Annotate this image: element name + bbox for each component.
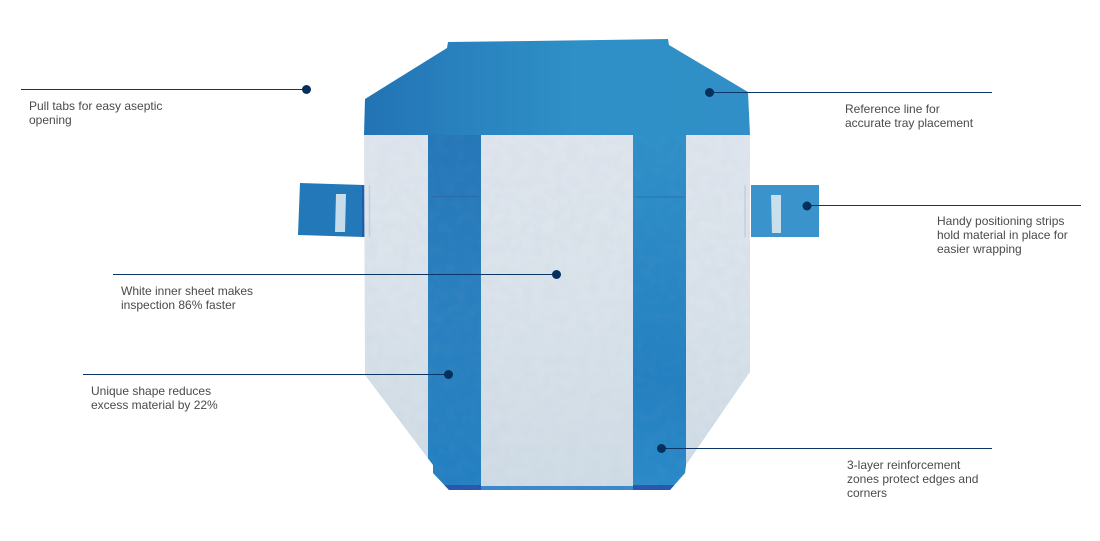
text: white inner sheet: inspection 86% faster bbox=[121, 298, 236, 312]
text: reinforcement zones: corners bbox=[847, 486, 887, 500]
faint attachment marks beside the tabs bbox=[370, 185, 745, 237]
callout: white inner sheet line bbox=[113, 270, 561, 279]
white inner sheet bbox=[360, 135, 755, 490]
text: reference line: Reference line for bbox=[845, 102, 940, 116]
callout: positioning strips line bbox=[802, 202, 1081, 210]
text: pull tabs: Pull tabs for easy aseptic bbox=[29, 99, 162, 113]
text: unique shape: excess material by 22% bbox=[91, 398, 218, 412]
top reinforcement panel bbox=[364, 39, 750, 135]
text: reinforcement zones: 3-layer reinforcement bbox=[847, 458, 960, 472]
right positioning tab bbox=[751, 185, 819, 237]
text: positioning strips: Handy positioning strips bbox=[937, 214, 1064, 228]
wrap body, clipped to the sheet outline bbox=[360, 135, 755, 491]
callout: reinforcement zones line bbox=[657, 444, 992, 453]
mottled fabric texture bbox=[360, 135, 755, 491]
right reinforcement strip bbox=[633, 135, 686, 487]
text: reference line bbox=[845, 102, 973, 130]
text: positioning strips: hold material in place for bbox=[937, 228, 1068, 242]
text: unique shape bbox=[91, 384, 218, 412]
text: positioning strips bbox=[937, 214, 1068, 256]
text: pull tabs: opening bbox=[29, 113, 72, 127]
text: white inner sheet bbox=[121, 284, 253, 312]
strip fold lines bbox=[431, 196, 685, 198]
text: reinforcement zones bbox=[847, 458, 978, 500]
text: white inner sheet: White inner sheet makes bbox=[121, 284, 253, 298]
left reinforcement strip bbox=[428, 135, 481, 487]
text: unique shape: Unique shape reduces bbox=[91, 384, 211, 398]
bottom dark fold, left and right bbox=[444, 485, 674, 490]
callout: reference line bbox=[705, 88, 992, 97]
left positioning tab bbox=[298, 183, 365, 237]
text: reinforcement zones: zones protect edges and bbox=[847, 472, 978, 486]
callout: pull tabs line bbox=[21, 85, 311, 94]
text: reference line: accurate tray placement bbox=[845, 116, 973, 130]
text: pull tabs bbox=[29, 99, 162, 127]
callout: unique shape line bbox=[83, 370, 453, 379]
bottom blue edge bbox=[445, 486, 674, 490]
text: positioning strips: easier wrapping bbox=[937, 242, 1022, 256]
